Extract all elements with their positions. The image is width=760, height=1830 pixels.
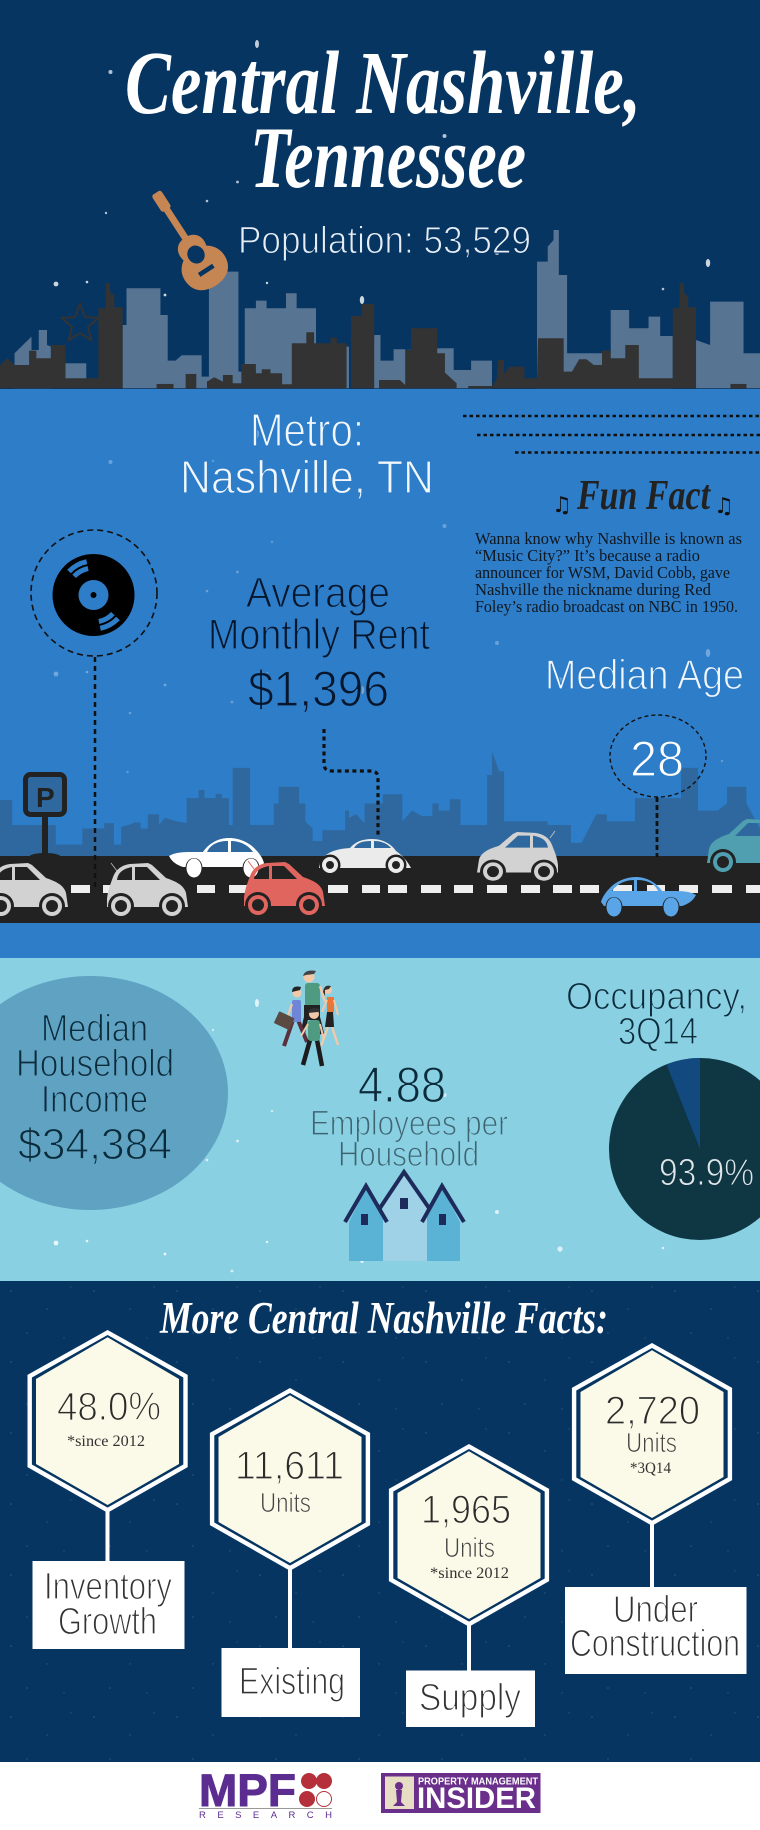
car: teal hatch bbox=[707, 819, 760, 875]
fact: supply: Units bbox=[444, 1532, 495, 1563]
fun fact text: Nashville the nickname during Red bbox=[475, 580, 711, 599]
fact: inventory growth bbox=[30, 1332, 186, 1649]
fun fact heading: Fun Fact bbox=[576, 473, 711, 519]
income bubble bbox=[0, 976, 228, 1210]
background skyline bbox=[0, 752, 760, 857]
dashed connector: vinyl to road bbox=[94, 657, 96, 891]
fact: under construction: *3Q14 bbox=[630, 1460, 671, 1477]
logo: MPF Research: RESEARCH bbox=[199, 1810, 332, 1821]
fun fact heading: ♫ bbox=[714, 494, 734, 519]
fact: supply: Supply bbox=[419, 1677, 521, 1719]
parking sign bbox=[26, 774, 64, 861]
car: red hatch bbox=[244, 861, 325, 918]
fun fact text: announcer for WSM, David Cobb, gave bbox=[475, 563, 730, 582]
fun fact text: Foley’s radio broadcast on NBC in 1950. bbox=[475, 597, 738, 616]
icon: walking family bbox=[274, 971, 338, 1066]
logo: MPF Research bbox=[199, 1765, 332, 1821]
icon: houses bbox=[345, 1172, 464, 1261]
panel: household section bbox=[0, 958, 760, 1342]
fact: existing bbox=[212, 1390, 368, 1717]
metro heading bbox=[180, 404, 434, 503]
logo: Property Management Insider: INSIDER bbox=[417, 1782, 536, 1815]
fact: under construction: Under bbox=[613, 1589, 698, 1631]
fact: inventory growth: 48.0% bbox=[57, 1385, 161, 1429]
more facts heading: More Central Nashville Facts: bbox=[159, 1293, 608, 1343]
panel: more facts section bbox=[0, 1281, 760, 1762]
title: Tennessee bbox=[250, 110, 526, 207]
fact: inventory growth: *since 2012 bbox=[67, 1433, 145, 1450]
average monthly rent: Monthly Rent bbox=[208, 611, 430, 659]
left person bbox=[274, 987, 307, 1046]
front person bbox=[301, 1008, 324, 1066]
fact: supply bbox=[391, 1446, 547, 1727]
front skyline bbox=[0, 283, 746, 389]
back skyline bbox=[15, 230, 760, 388]
occupancy heading: 3Q14 bbox=[618, 1011, 698, 1053]
road bbox=[0, 856, 760, 923]
income bubble: Median bbox=[41, 1008, 148, 1050]
fun fact text: “Music City?” It’s because a radio bbox=[475, 546, 700, 565]
fact: supply: *since 2012 bbox=[430, 1565, 509, 1582]
car: white beetle bbox=[169, 838, 264, 878]
cars bbox=[0, 819, 760, 919]
fun fact text bbox=[475, 529, 742, 616]
car: grey hatch bbox=[107, 863, 188, 919]
employees per household: Employees per bbox=[310, 1104, 508, 1143]
average monthly rent: $1,396 bbox=[248, 661, 389, 717]
parking sign: P bbox=[36, 782, 55, 813]
employees per household: Household bbox=[338, 1135, 479, 1174]
dashed connector: age to road bbox=[656, 797, 658, 857]
tall person bbox=[303, 971, 325, 1034]
metro heading: Nashville, TN bbox=[180, 451, 434, 503]
employees per household bbox=[310, 1057, 508, 1174]
median age value bbox=[610, 715, 706, 797]
right person bbox=[321, 986, 338, 1046]
occupancy heading bbox=[566, 976, 747, 1053]
car: blue beetle bbox=[601, 877, 696, 917]
fact: inventory growth: Inventory bbox=[44, 1566, 172, 1608]
fun fact text: Wanna know why Nashville is known as bbox=[475, 529, 742, 548]
car: grey left edge bbox=[0, 863, 68, 919]
median age value: 28 bbox=[630, 731, 684, 787]
fact: supply: 1,965 bbox=[421, 1488, 511, 1532]
average monthly rent bbox=[208, 569, 430, 717]
panel: header night sky bbox=[0, 0, 760, 389]
car: grey hatch facing left bbox=[477, 831, 558, 884]
occupancy heading: Occupancy, bbox=[566, 976, 747, 1018]
income bubble: Household bbox=[16, 1043, 174, 1085]
logo: MPF Research: MPF bbox=[199, 1765, 296, 1816]
fact: existing: Units bbox=[260, 1487, 311, 1518]
panel: footer bbox=[0, 1762, 760, 1830]
income bubble: Income bbox=[41, 1079, 148, 1121]
logo: Property Management Insider: PROPERTY MANAGEMENT bbox=[418, 1776, 538, 1788]
population: Population: 53,529 bbox=[238, 220, 531, 262]
fact: inventory growth: Growth bbox=[58, 1601, 157, 1643]
fact: existing: 11,611 bbox=[235, 1444, 344, 1488]
metro heading: Metro: bbox=[250, 404, 364, 456]
dashed connector: rent to road bbox=[324, 729, 378, 838]
logo: Property Management Insider bbox=[381, 1773, 540, 1815]
icon: star outline bbox=[62, 304, 98, 340]
car: light beetle bbox=[319, 839, 411, 876]
icon: vinyl record with dashed ring bbox=[31, 530, 157, 656]
fact: under construction: 2,720 bbox=[605, 1389, 700, 1433]
title bbox=[125, 34, 641, 207]
fact: existing: Existing bbox=[239, 1661, 345, 1703]
employees per household: 4.88 bbox=[358, 1057, 446, 1113]
pie chart: occupancy bbox=[609, 1058, 760, 1240]
panel: metro blue section bbox=[0, 389, 760, 959]
icon: guitar bbox=[136, 180, 236, 298]
average monthly rent: Average bbox=[246, 569, 390, 617]
income bubble: $34,384 bbox=[18, 1120, 172, 1169]
fact: under construction bbox=[565, 1346, 746, 1674]
fact: under construction: Units bbox=[626, 1427, 677, 1458]
fun fact heading: ♫ bbox=[552, 493, 572, 518]
dotted accent lines bbox=[463, 416, 760, 452]
